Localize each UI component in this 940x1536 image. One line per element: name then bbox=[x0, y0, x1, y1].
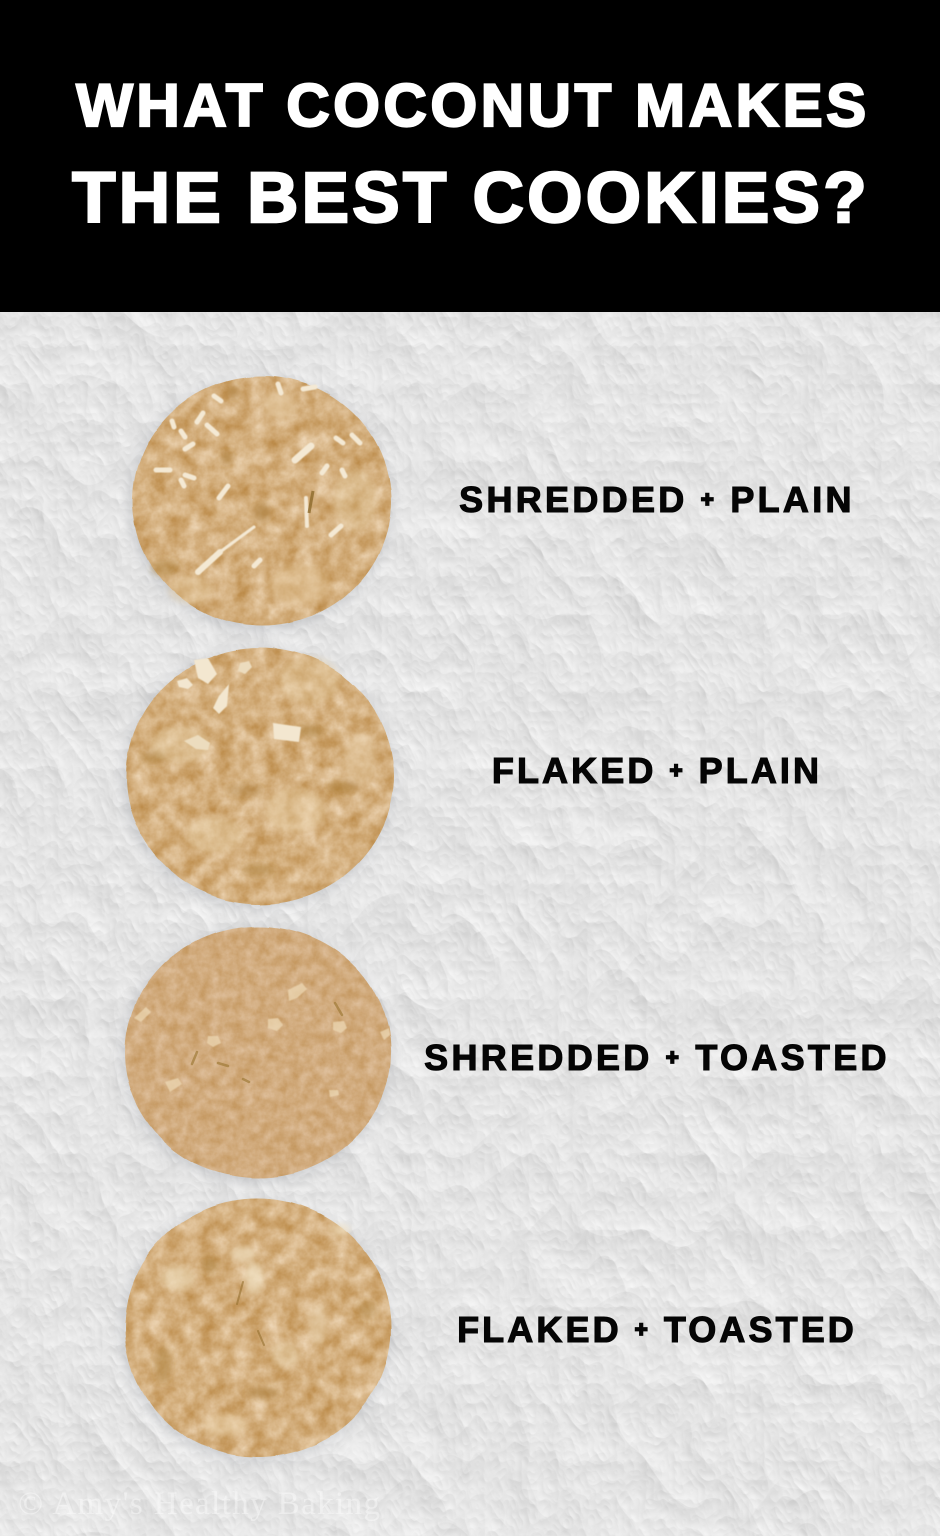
label: shredded plain: SHREDDED + PLAIN bbox=[459, 479, 855, 520]
title: WHAT COCONUT MAKES bbox=[76, 72, 870, 139]
background: crinkled parchment paper bbox=[0, 312, 940, 1536]
cookies bbox=[118, 376, 397, 1464]
cookie: flaked toasted bbox=[121, 1199, 391, 1461]
header band bbox=[0, 0, 940, 312]
cookie: flaked plain bbox=[122, 648, 394, 908]
title bbox=[72, 72, 870, 238]
cookie: shredded toasted bbox=[121, 926, 391, 1182]
cookie: shredded plain bbox=[129, 376, 391, 630]
watermark: © Amy's Healthy Baking bbox=[18, 1486, 381, 1522]
title: THE BEST COOKIES? bbox=[72, 159, 870, 238]
label: shredded toasted: SHREDDED + TOASTED bbox=[424, 1037, 890, 1078]
label: flaked toasted: FLAKED + TOASTED bbox=[457, 1309, 857, 1350]
label: flaked plain: FLAKED + PLAIN bbox=[492, 750, 822, 791]
